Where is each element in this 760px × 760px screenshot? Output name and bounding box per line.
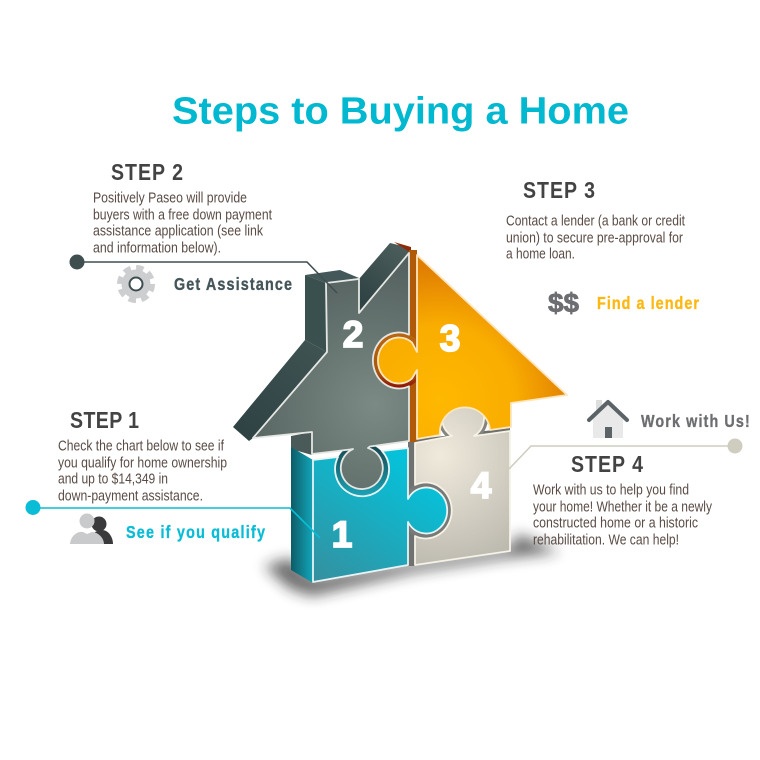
step 3 block [506,178,700,318]
step 3 call to action: Find a lender [597,294,700,313]
step 2 body: Positively Paseo will provide [93,190,247,206]
step 3 heading: STEP 3 [523,178,595,203]
ground shadow [264,534,560,596]
step 4 body: rehabilitation. We can help! [533,532,679,548]
step 4 heading: STEP 4 [571,452,643,477]
step 1 body: Check the chart below to see if [58,438,225,454]
socket rings [335,332,488,538]
step 3 body: Contact a lender (a bank or credit [506,212,686,230]
leader line: step 2 [70,254,337,293]
number 3: 3 [440,318,460,359]
step 1 block [58,408,265,544]
step 3 body [506,212,686,262]
number 4: 4 [471,465,492,506]
step 1 call to action: See if you qualify [126,523,265,542]
piece 4: beige [415,397,510,565]
step 4 body: Work with us to help you find [533,482,689,498]
icon: dollar signs: $$ [548,288,579,318]
step 4 block [533,400,750,548]
step 2 call to action: Get Assistance [174,275,292,294]
piece 1: teal [313,448,447,582]
title: Steps to Buying a Home [172,90,629,132]
step 1 heading: STEP 1 [70,408,139,433]
piece 2: grey [253,253,409,489]
piece 3: orange [378,255,567,439]
step 2 body: assistance application (see link [93,222,263,240]
number 1: 1 [332,514,352,555]
step 4 body: your home! Whether it be a newly [533,498,712,516]
step 1 body: and up to $14,349 in [58,470,168,488]
house puzzle illustration [233,242,567,596]
house side faces [233,242,510,583]
leader line: step 1 [26,500,320,538]
step 2 body [93,190,273,256]
step 1 body: you qualify for home ownership [58,454,227,472]
step 2 body: and information below). [93,240,221,256]
number 2: 2 [343,314,363,355]
step 2 body: buyers with a free down payment [93,206,273,224]
step 2 block [93,160,292,300]
step 3 body: union) to secure pre-approval for [506,230,683,246]
leader line: step 4 [509,438,742,469]
step 1 body: down-payment assistance. [58,488,203,504]
step 1 body [58,438,227,504]
step 4 call to action: Work with Us! [641,412,750,431]
step 4 body: constructed home or a historic [533,514,698,532]
icon: gear [120,268,152,300]
step 4 body [533,482,712,548]
step 3 body: a home loan. [506,246,575,262]
icon: people [70,514,113,544]
step 2 heading: STEP 2 [111,160,183,185]
icon: house [589,400,627,438]
